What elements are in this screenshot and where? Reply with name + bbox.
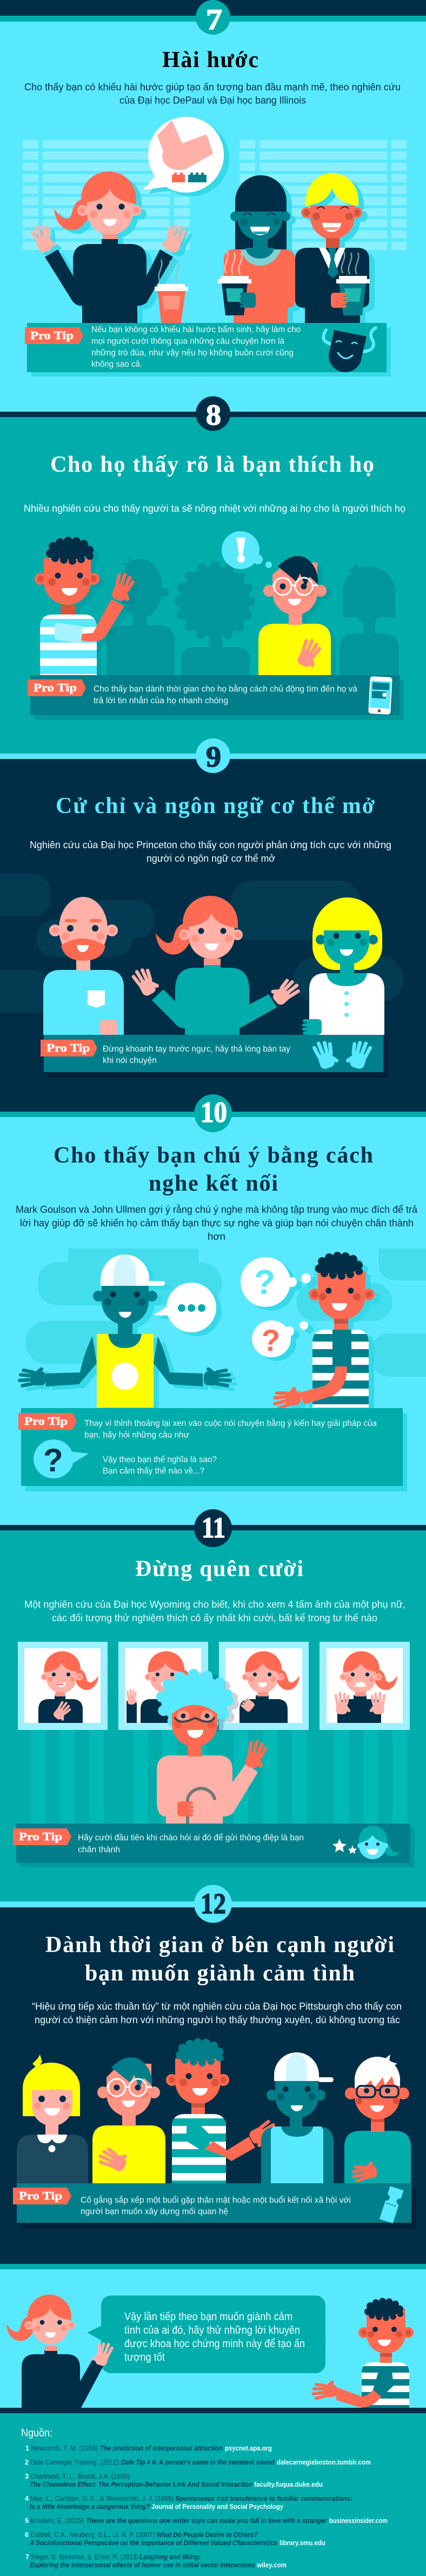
- number badge 10: [194, 1094, 232, 1132]
- pro tip text: mọi người cười thông qua những câu chuyện hơn là: [91, 336, 284, 346]
- source 3: Chartrand, T. L., Brand, J.A. (1999): [30, 2473, 130, 2480]
- thought bubble with question marks: ?: [254, 1263, 275, 1302]
- pro tip box: [41, 1035, 388, 1078]
- speech bubble with dots: [154, 1283, 216, 1332]
- question bubble: ?: [43, 1442, 63, 1478]
- number badge 10: 10: [201, 1096, 227, 1128]
- pro tip text: người bạn muốn xây dựng mối quan hệ: [81, 2207, 228, 2216]
- closing text: tình của ai đó, hãy thử những lời khuyên: [124, 2324, 300, 2336]
- intro text: [30, 840, 391, 864]
- pro tip text: [94, 685, 357, 705]
- source 3: 3: [25, 2473, 29, 2480]
- intro text: [24, 82, 401, 106]
- pro tip tag: Pro Tip: [19, 2189, 62, 2202]
- illustration: man with cap, tank top: [261, 2052, 334, 2183]
- number badge 11: 11: [202, 1511, 225, 1544]
- source 4: Journal of Personality and Social Psychology: [151, 2503, 283, 2511]
- title: Cho thấy bạn chú ý bằng cách: [54, 1143, 373, 1168]
- source 1: The prediction of interpersonal attraction: [100, 2445, 223, 2452]
- title: Cho họ thấy rõ là bạn thích họ: [50, 452, 374, 477]
- sources heading: Nguồn:: [21, 2427, 52, 2439]
- source 6: Cottrell, C.A., Neuberg, S.L., Li, N. P. (2007): [30, 2531, 155, 2539]
- source 7: 7: [25, 2553, 29, 2561]
- portrait 2: pointing: [127, 1651, 202, 1723]
- source 2: Dale Carnegie Training. (2012): [30, 2459, 119, 2466]
- icon: phone: [368, 676, 392, 715]
- pro tip tag: Pro Tip: [34, 681, 77, 694]
- intro text: “Hiệu ứng tiếp xúc thuần túy” từ một nghiên cứu của Đại học Pittsburgh cho thấy con: [32, 2001, 402, 2012]
- title: [54, 1143, 373, 1196]
- number badge 9: [196, 738, 230, 773]
- example questions: Bạn cảm thấy thế nào về...?: [103, 1467, 204, 1476]
- portrait 4: hands raised: [334, 1651, 397, 1723]
- thought bubble with question marks: [241, 1257, 311, 1357]
- example questions: Vậy theo bạn thế nghĩa là sao?: [103, 1455, 217, 1464]
- illustration: coral coffee cup: [155, 260, 188, 323]
- panel: section 10 active listening: [16, 1094, 426, 1491]
- illustration: woman waving: [29, 171, 188, 323]
- title: Cử chỉ và ngôn ngữ cơ thể mở: [56, 794, 375, 818]
- source 6: library.smu.edu: [279, 2539, 325, 2547]
- source 2: [25, 2459, 371, 2466]
- source 6: What Do People Desire in Others?: [156, 2531, 257, 2539]
- pro tip tag: [28, 679, 86, 696]
- speech bubble with foot and lego: [143, 117, 224, 193]
- source 2: 2: [25, 2459, 29, 2466]
- panel: section 12 spend time: [13, 1885, 416, 2229]
- thought bubble with exclamation: [222, 531, 272, 569]
- source 7: wiley.com: [256, 2561, 287, 2569]
- panel: section 8 show you like them: [24, 396, 405, 720]
- source 5: businessinsider.com: [329, 2517, 388, 2525]
- panel: closing conversation: [6, 2295, 414, 2408]
- source 1: 1: [25, 2445, 29, 2452]
- question bubble: [34, 1439, 89, 1478]
- source 7: [25, 2553, 287, 2569]
- illustration: woman with dark hair: [224, 175, 295, 323]
- title: bạn muốn giành cảm tình: [85, 1961, 355, 1986]
- title: Dành thời gian ở bên cạnh người: [45, 1932, 394, 1957]
- source 4: Spontaneous trait transference to familiar communications:: [175, 2495, 352, 2502]
- illustration: man in striped shirt: [271, 1252, 375, 1411]
- pro tip text: chân thành: [78, 1845, 120, 1854]
- number badge 12: 12: [201, 1887, 226, 1920]
- illustration: man with glasses, yellow shirt: [92, 2057, 165, 2183]
- intro text: của Đại học DePaul và Đại học bang Illinois: [119, 95, 306, 106]
- number badge 11: [194, 1509, 232, 1547]
- source 4: Mae, L., Carlston, D. E., & Skowronski, J. J. (1999): [30, 2495, 174, 2502]
- number badge 8: 8: [206, 399, 221, 431]
- pro tip text: những trò đùa, như vậy nếu họ không buồn cười cũng: [91, 348, 294, 358]
- illustration: blonde woman: [302, 897, 384, 1035]
- icon: comedy mask: [323, 328, 376, 372]
- number badge 8: [196, 396, 230, 431]
- silhouettes background crowd: [106, 557, 399, 675]
- thought bubble with question marks: ?: [262, 1323, 280, 1357]
- wall stripes: [31, 1730, 407, 1824]
- intro text: [24, 1599, 405, 1623]
- closing text: Vậy lần tiếp theo bạn muốn giành cảm: [124, 2311, 292, 2323]
- title: Hài hước: [162, 48, 258, 72]
- pro tip tag: [13, 1828, 71, 1845]
- intro text: [32, 2001, 402, 2025]
- panel: section 7 humor: [23, 0, 407, 377]
- source 6: [25, 2531, 325, 2547]
- background clouds: [25, 1249, 426, 1377]
- panel: section 9 open body language: [0, 738, 403, 1078]
- pro tip text: Cho thấy bạn dành thời gian cho họ bằng cách chủ động tìm đến họ và: [94, 685, 357, 693]
- pro tip tag: Pro Tip: [24, 1415, 68, 1428]
- pro tip box: [18, 1408, 407, 1491]
- illustration: man with glasses: [258, 556, 331, 675]
- pro tip text: [78, 1833, 304, 1854]
- intro text: các đối tượng thử nghiệm thích cô ấy nhất khi cười, bất kể trong tư thế nào: [52, 1613, 377, 1623]
- portrait 3: smiling: [239, 1651, 299, 1723]
- icon: open hands: [311, 1037, 374, 1071]
- illustration: man's coffee cup: [331, 252, 370, 315]
- source 7: Laughing and liking:: [139, 2553, 201, 2561]
- pro tip text: Thay vì thỉnh thoảng lại xen vào cuộc nói chuyện bằng ý kiến hay giải pháp của: [84, 1419, 377, 1428]
- number badge 7: 7: [206, 3, 222, 36]
- illustration: blonde girl: [17, 2055, 88, 2183]
- illustration: man with white hair and dark glasses: [344, 2055, 411, 2183]
- icon: smiling girl with stars: [332, 1826, 401, 1859]
- intro text: Cho thấy bạn có khiếu hài hước giúp tạo ấn tượng ban đầu mạnh mẽ, theo nghiên cứu: [24, 82, 401, 93]
- number badge 12: [194, 1885, 232, 1923]
- background clouds: [0, 874, 403, 1013]
- source 4: [25, 2495, 352, 2511]
- closing text: [124, 2311, 305, 2363]
- intro text: Nhiều nghiên cứu cho thấy người ta sẽ nồng nhiệt với những ai họ cho là người thích họ: [24, 503, 405, 514]
- source 7: Treger, S. Sprecher, S. Erber, R. (2013): [30, 2553, 138, 2561]
- pro tip tag: Pro Tip: [19, 1830, 62, 1843]
- intro text: hơn: [208, 1231, 225, 1242]
- picture frames: [18, 1642, 410, 1730]
- panel: sources: [21, 2427, 388, 2569]
- title: Đừng quên cười: [135, 1557, 303, 1582]
- example questions: [103, 1455, 217, 1476]
- source 7: Exploring the interpersonal effects of humor use in initial social interactions: [30, 2561, 255, 2569]
- source 1: Newcomb, T. M. (1956): [31, 2445, 98, 2452]
- pro tip text: không sao cả.: [91, 360, 142, 369]
- title: [45, 1932, 394, 1986]
- pro tip text: bạn, hãy hỏi những câu như: [84, 1430, 189, 1440]
- intro text: Nghiên cứu của Đại học Princeton cho thấy con người phản ứng tích cực với những: [30, 840, 391, 850]
- intro text: người có ngôn ngữ cơ thể mở: [147, 853, 275, 864]
- source 4: Is a little knowledge a dangerous thing?: [30, 2503, 150, 2511]
- source 3: The Chameleon Effect: The Perception-Behavior Link And Social Interaction: [30, 2481, 252, 2488]
- pro tip text: khi nói chuyện: [103, 1056, 157, 1065]
- number badge 7: [196, 0, 230, 36]
- illustration: man in teal stripes: [166, 2038, 282, 2185]
- illustration: man with cap: [18, 1254, 232, 1408]
- pro tip tag: Pro Tip: [30, 329, 74, 342]
- source 3: [25, 2473, 323, 2488]
- illustration: man in suit: [295, 173, 369, 323]
- pro tip tag: [18, 1413, 77, 1430]
- source 3: faculty.fuqua.duke.edu: [254, 2481, 323, 2488]
- source 5: These are the questions one writer says can make you fall in love with a stranger: [86, 2517, 328, 2525]
- pro tip text: Nếu bạn không có khiếu hài hước bẩm sinh, hãy làm cho: [91, 325, 301, 334]
- pro tip box: [25, 323, 391, 377]
- source 2: dalecarnegieboston.tumblr.com: [277, 2459, 371, 2466]
- source 2: Dale Tip # 6: A person’s name is the sweetest sound: [121, 2459, 275, 2466]
- pro tip text: [91, 325, 301, 369]
- pro tip tag: Pro Tip: [46, 1041, 90, 1054]
- source 6: 6: [25, 2531, 29, 2539]
- intro text: Mark Goulson và John Ullmen gợi ý rằng chú ý nghe mà không tập trung vào mục đích để trả: [16, 1204, 418, 1215]
- pro tip text: Đừng khoanh tay trước ngực, hãy thả lòng bàn tay: [103, 1045, 290, 1054]
- pro tip text: Cố gắng sắp xếp một buổi gặp thân mật hoặc một buổi kết nối xã hội với: [81, 2196, 351, 2205]
- source 5: Brodwin, E. (2015): [30, 2517, 84, 2525]
- illustration: man in stripes: [311, 2298, 414, 2408]
- illustration: bald bearded man: [43, 897, 124, 1035]
- illustration: waving man in stripes: [35, 537, 138, 675]
- illustration: woman with open arms: [130, 896, 303, 1035]
- closing text: được khoa học chứng minh này để tạo ấn: [124, 2338, 305, 2350]
- pro tip text: [103, 1045, 290, 1065]
- illustration: woman's coffee cup: [218, 252, 256, 315]
- pro tip text: [84, 1419, 377, 1440]
- closing text: tượng tốt: [124, 2352, 165, 2363]
- source 6: A Sociofunctional Perspective on the Importance of Different Valued Characteristics: [29, 2539, 277, 2547]
- pro tip text: Hãy cười đầu tiên khi chào hỏi ai đó để gửi thông điệp là bạn: [78, 1833, 304, 1842]
- title: nghe kết nối: [149, 1171, 278, 1196]
- number badge 9: 9: [206, 741, 221, 773]
- intro text: lời hay giúp đỡ sẽ khiến họ cảm thấy bạn thực sự nghe và giúp bạn nói chuyện chân thành: [20, 1218, 414, 1228]
- pro tip tag: [25, 327, 83, 344]
- illustration: grandmother with cane: [157, 1674, 271, 1824]
- pro tip box: [13, 2183, 416, 2229]
- speech bubble: [87, 2296, 325, 2373]
- pro tip box: [13, 1824, 415, 1867]
- intro text: người có thiện cảm hơn với những người họ thấy thường xuyên, dù không tương tác: [35, 2014, 400, 2025]
- pro tip box: [28, 675, 404, 720]
- panel: section 11 smile: [13, 1509, 415, 1867]
- source 4: 4: [25, 2495, 29, 2502]
- pro tip text: trả lời tin nhắn của họ nhanh chóng: [94, 696, 228, 705]
- source 5: 5: [25, 2517, 29, 2525]
- window blinds background: [23, 140, 407, 250]
- illustration: woman: [6, 2295, 115, 2408]
- intro text: Một nghiên cứu của Đại học Wyoming cho biết, khi cho xem 4 tấm ảnh của một phụ nữ,: [24, 1599, 405, 1610]
- intro text: [16, 1204, 418, 1242]
- source 1: psycnet.apa.org: [225, 2445, 272, 2452]
- source 1: [25, 2445, 272, 2452]
- pro tip text: [81, 2196, 351, 2216]
- pro tip tag: [13, 2188, 71, 2204]
- portrait 1: neutral: [38, 1651, 98, 1723]
- pro tip tag: [41, 1040, 97, 1056]
- icon: ticket: [380, 2186, 403, 2223]
